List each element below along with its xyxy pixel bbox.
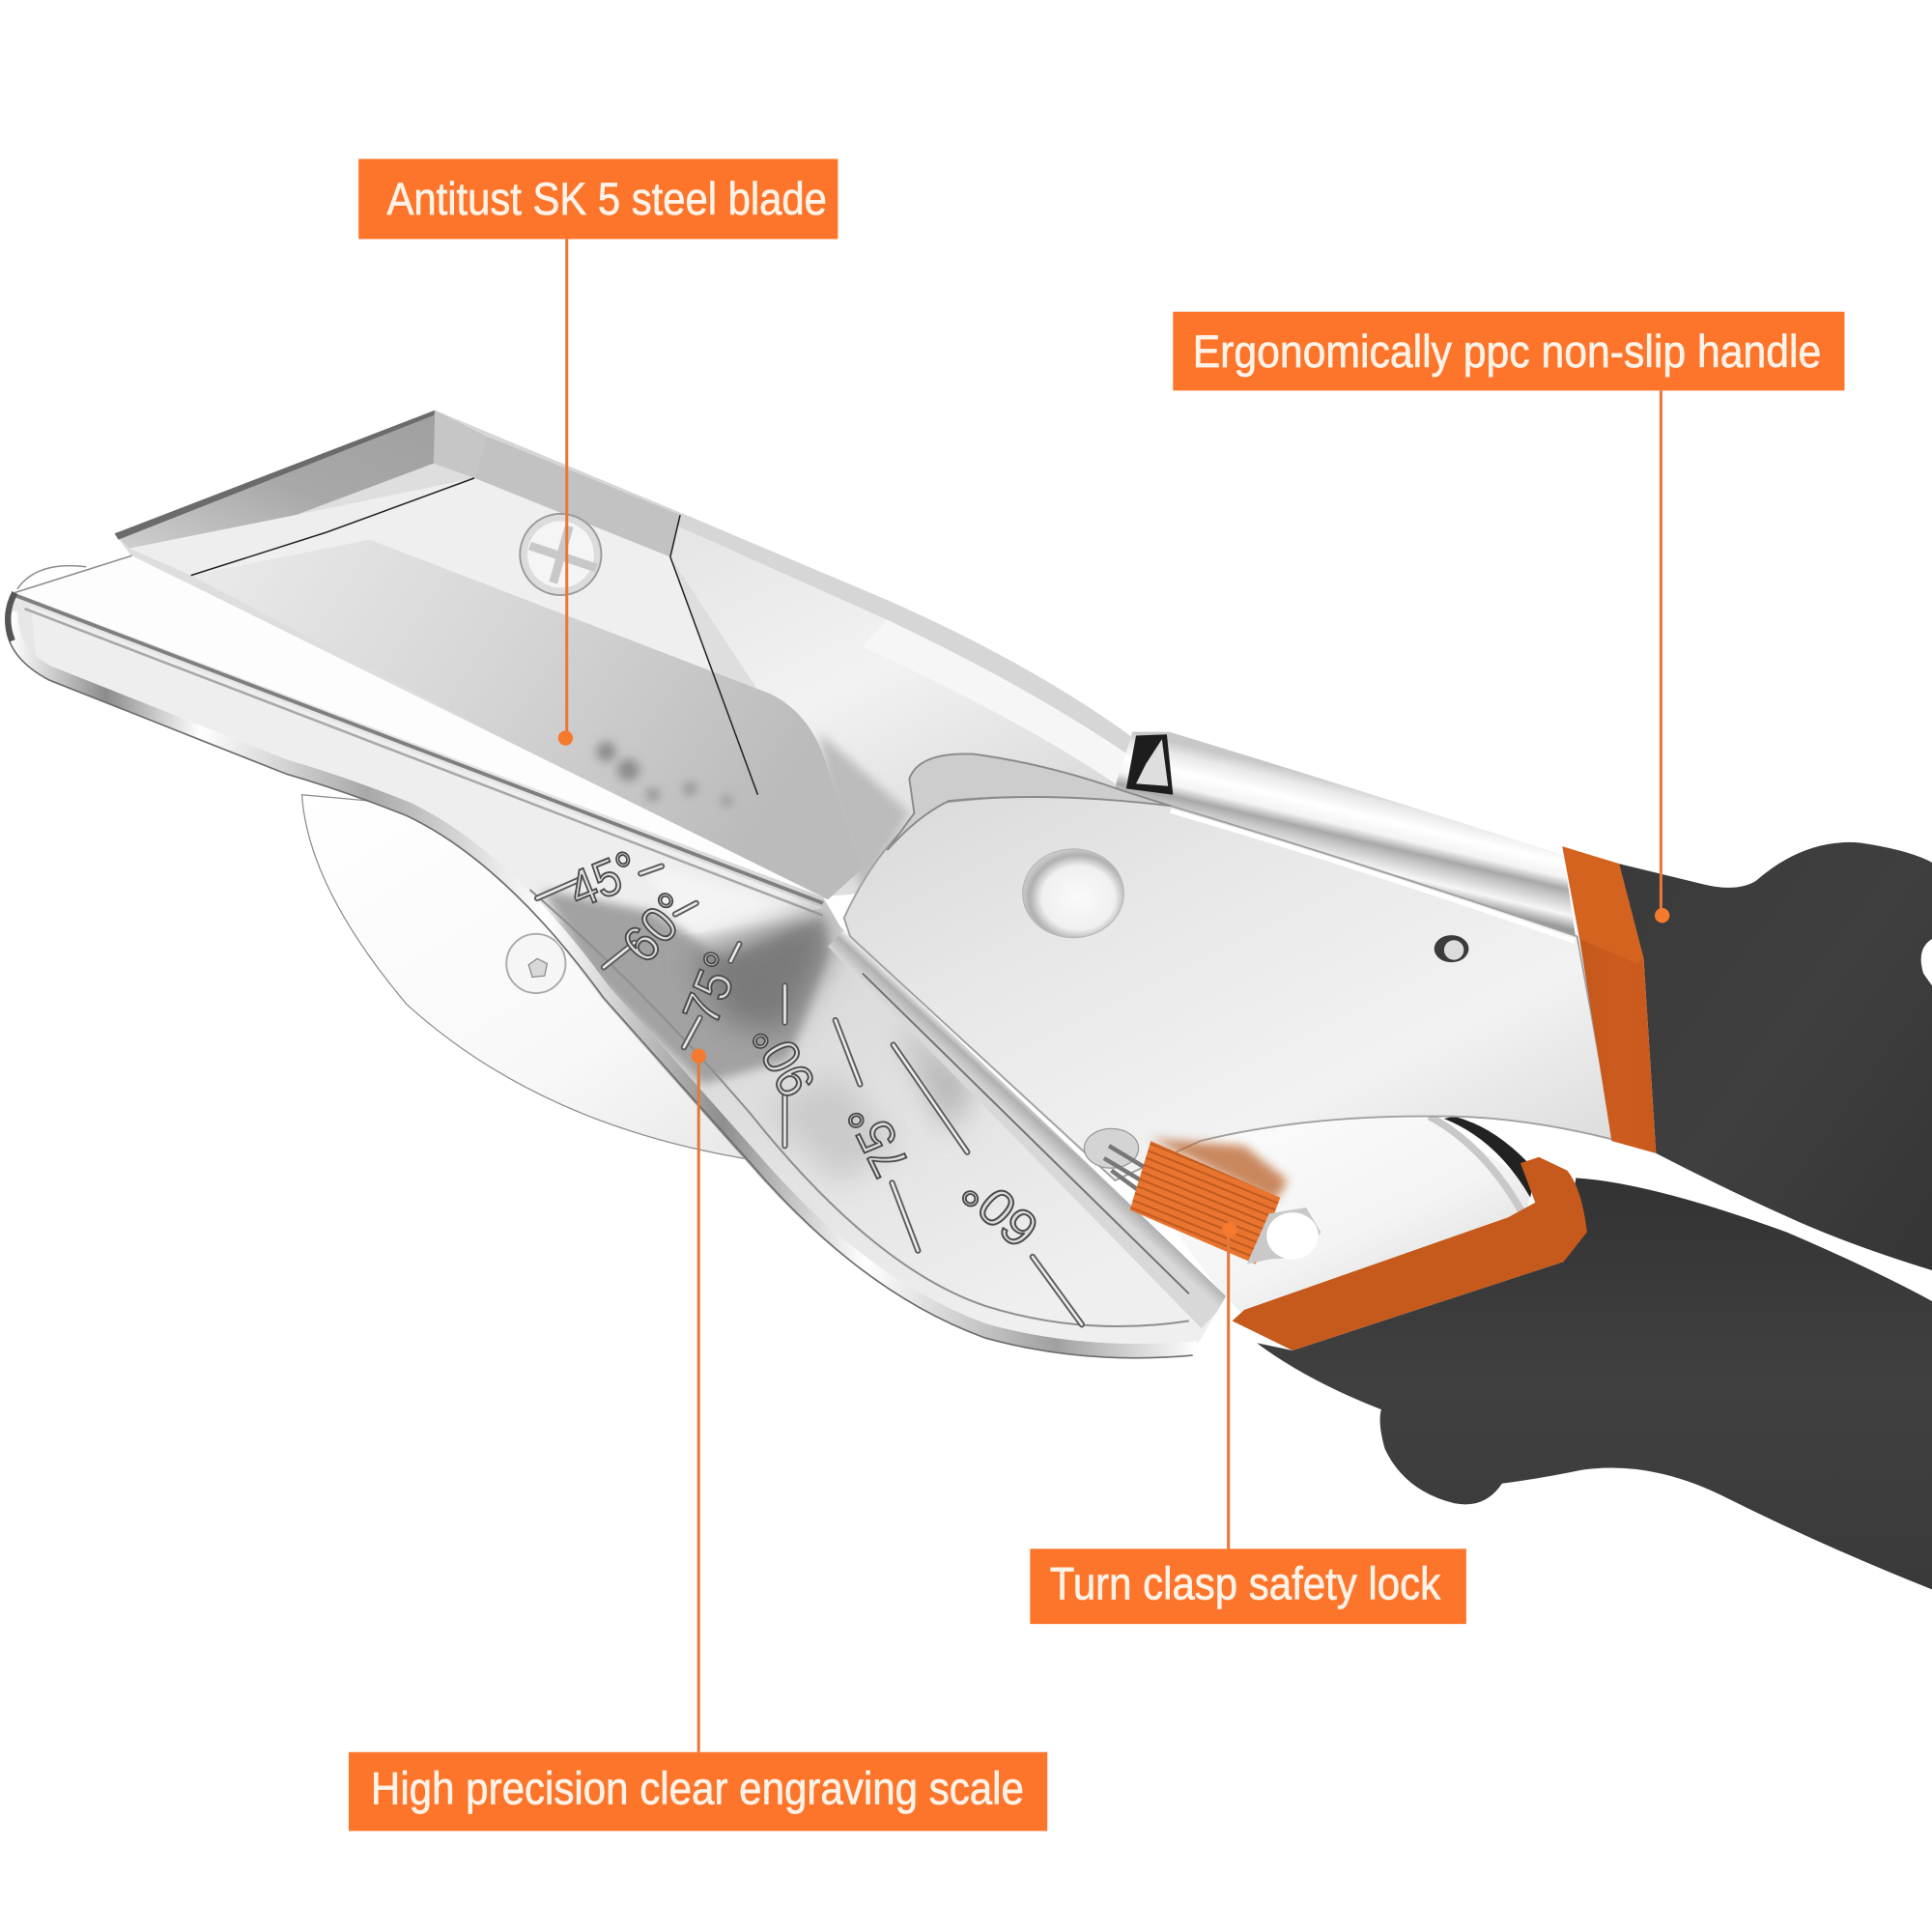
callout: lock xyxy=(1030,1222,1466,1624)
upper handle rail xyxy=(1115,732,1576,939)
leader line: lock xyxy=(1227,1230,1230,1548)
dot: blade xyxy=(558,730,573,746)
main upper plate xyxy=(844,753,1614,1180)
lower handle grip xyxy=(1233,1157,1932,1589)
leader line: handle xyxy=(1660,390,1662,916)
tip top outline xyxy=(14,555,131,593)
dot: lock xyxy=(1222,1222,1237,1237)
spring xyxy=(1084,1128,1146,1190)
label text: lock: Turn clasp safety lock xyxy=(1050,1559,1440,1610)
blade gray band xyxy=(191,540,863,899)
screw section xyxy=(474,437,680,557)
dark notch xyxy=(1126,734,1173,795)
dot: scale xyxy=(692,1048,706,1064)
fence lines xyxy=(14,595,823,903)
cutting table xyxy=(6,555,1233,1358)
label box: lock xyxy=(1030,1548,1466,1624)
lock clasp xyxy=(1084,1128,1321,1264)
label text: scale: High precision clear engraving scale xyxy=(371,1763,1024,1814)
bevel xyxy=(434,411,487,478)
bolt on disk xyxy=(506,934,565,993)
blade xyxy=(115,411,1135,899)
lower collar xyxy=(1233,1157,1587,1350)
disk behind table xyxy=(301,795,863,1161)
blade right section xyxy=(670,513,1135,894)
white fence strip xyxy=(14,555,823,897)
dark scale shadow xyxy=(542,890,828,1084)
callout: scale xyxy=(349,1048,1047,1831)
engraved scale: 75° xyxy=(837,1094,921,1185)
engraved scale: 60° xyxy=(952,1161,1050,1258)
engraved scale: 90° xyxy=(742,1013,827,1105)
upper handle grip xyxy=(1562,842,1932,1270)
leader line: scale xyxy=(697,1056,699,1752)
right fence xyxy=(828,929,1233,1328)
scale labels: 45° xyxy=(561,840,646,920)
label box: blade xyxy=(358,159,838,239)
chrome rim xyxy=(11,611,1198,1350)
screw xyxy=(520,514,601,595)
engraved scale: 75° xyxy=(672,945,753,1032)
pivot boss xyxy=(887,753,1171,850)
label text: handle: Ergonomically ppc non-slip handle xyxy=(1193,327,1821,378)
lower plate and jaw behind handles xyxy=(1084,1109,1535,1316)
label box: scale xyxy=(349,1752,1047,1831)
blade spine highlight xyxy=(435,411,1135,754)
miter shears illustration xyxy=(6,411,1932,1589)
callout: blade xyxy=(358,159,838,746)
callout: handle xyxy=(1173,312,1844,923)
upper collar xyxy=(1562,846,1656,1153)
small rivet hole xyxy=(1435,935,1468,962)
light wedge above scale xyxy=(690,912,810,937)
lock hole xyxy=(1266,1212,1319,1260)
dimple xyxy=(1023,849,1123,938)
dot: handle xyxy=(1655,908,1669,923)
label box: handle xyxy=(1173,312,1844,390)
blade lines xyxy=(191,478,757,795)
engraved scale: 60° xyxy=(611,882,702,974)
lever reflection xyxy=(1151,1139,1288,1202)
leader line: blade xyxy=(566,239,568,738)
blurred reflection xyxy=(596,742,732,806)
label text: blade: Antitust SK 5 steel blade xyxy=(387,174,827,225)
engraved scale xyxy=(537,840,1082,1324)
